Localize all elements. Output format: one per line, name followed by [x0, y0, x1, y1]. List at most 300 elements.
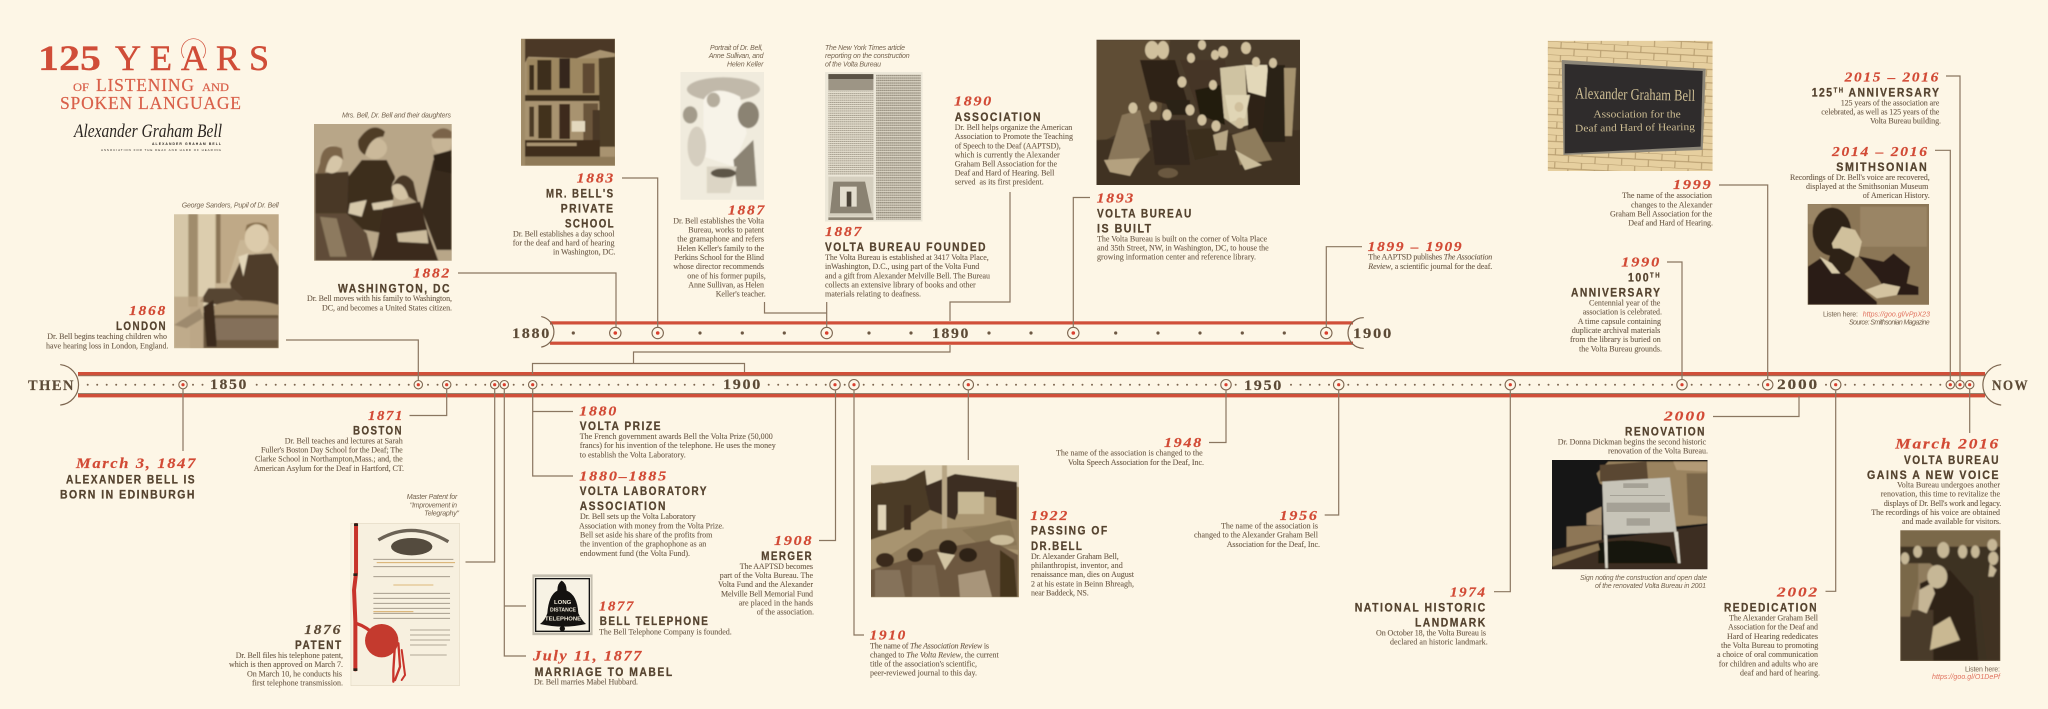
heading: VOLTA BUREAU FOUNDED [825, 240, 987, 254]
body text: 125 years of the association are [1841, 99, 1940, 108]
photo: master patent document [350, 523, 460, 686]
year: 1899 – 1909 [1368, 239, 1463, 254]
body text [1097, 234, 1269, 262]
heading: VOLTA BUREAU [1904, 453, 2000, 467]
body text: Keller's teacher. [716, 290, 766, 299]
body text: the Volta Bureau grounds. [1579, 344, 1662, 353]
year: 1974 [1450, 584, 1487, 599]
body text: changed to the Alexander Graham Bell [1194, 531, 1319, 540]
event markers [179, 380, 1974, 390]
event: March 2016 Volta Bureau Gains a New Voice [1867, 437, 2007, 681]
connector: 2002 [1826, 390, 1836, 591]
body text: DC, and becomes a United States citizen. [322, 304, 452, 313]
logo: AG Bell signature: ASSOCIATION FOR THE DEAF AND HARD OF HEARING [101, 148, 222, 152]
event: 1990 100th Anniversary [1570, 255, 1662, 353]
connector: 1890 [532, 192, 1010, 374]
heading [1355, 601, 1487, 630]
body text: Dr. Bell begins teaching children who [47, 332, 167, 341]
listen link: https://goo.gl/O1DePf [1932, 674, 2001, 681]
event: 1880 Volta Prize [579, 403, 776, 459]
connector: 1876 [466, 389, 495, 562]
connector: 1974 [1494, 390, 1510, 592]
body text: Graham Bell Association for the [1610, 209, 1712, 218]
body text [1376, 629, 1488, 647]
body text [1790, 173, 1930, 200]
photo caption: Anne Sullivan, and [708, 53, 765, 60]
body text: which is then approved on March 7. [229, 660, 343, 669]
label: NOW: NOW [1992, 378, 2029, 394]
event: 1887 Volta Bureau Founded [825, 45, 990, 299]
body text: title of the association's scientific, [870, 660, 977, 669]
body text: The AAPTSD becomes [740, 562, 813, 571]
decade labels: 1900 [723, 377, 762, 393]
body text: Volta Bureau undergoes another [1897, 481, 2000, 490]
heading [1031, 524, 1109, 553]
event: 1876 Patent [229, 494, 460, 688]
year: 2014 – 2016 [1831, 144, 1929, 159]
event: 1868 London [46, 202, 287, 357]
event: 1956 name change [1194, 508, 1320, 549]
event: 2014-2016 Smithsonian [1790, 144, 1937, 327]
photo: plaque [1548, 40, 1713, 171]
icon: Long Distance Telephone bell sign: TELEPHONE [545, 616, 582, 622]
heading: ASSOCIATION [580, 499, 667, 513]
logo: AG Bell signature [72, 121, 222, 152]
year: July 11, 1877 [532, 649, 643, 665]
body text: Deaf and Hard of Hearing. Bell [955, 169, 1055, 178]
heading: RENOVATION [1625, 425, 1706, 439]
body text: Dr. Bell establishes a day school [513, 230, 615, 239]
photo: Volta Bureau sign [1552, 460, 1708, 570]
connector: 1999 [1719, 185, 1768, 380]
body text: Association for the Deaf and [1728, 623, 1818, 632]
heading [60, 472, 196, 501]
year: March 3, 1847 [75, 456, 197, 472]
body text: Dr. Bell sets up the Volta Laboratory [580, 512, 696, 521]
heading: PRIVATE [561, 201, 614, 215]
body text: whose director recommends [673, 262, 764, 271]
event: 1974 National Historic Landmark [1355, 584, 1488, 647]
body text: Deaf and Hard of Hearing. [1628, 218, 1713, 227]
year: 1948 [1164, 435, 1203, 450]
event: 1877 Bell Telephone [532, 574, 732, 636]
connector: 1908 [819, 390, 836, 540]
connector: 1883 [622, 178, 658, 327]
connector: 2000 [1713, 396, 1799, 416]
labels: 1880, 1890, 1900: 1890 [932, 326, 970, 342]
connector: 1899 [1326, 247, 1362, 327]
year: 1868 [129, 303, 167, 318]
body text: On March 10, he conducts his [247, 669, 342, 678]
body text: A time capsule containing [1578, 317, 1661, 326]
year: 1880 [579, 403, 618, 418]
body text: for children and adults who are [1719, 659, 1818, 668]
event: 1999 name change [1548, 41, 1713, 227]
body text: Helen Keller's family to the [677, 244, 764, 253]
body text: Bell set aside his share of the profits from [580, 531, 713, 540]
body text: Dr. Bell establishes the Volta [673, 217, 764, 226]
logo: AG Bell signature: Alexander Graham Bell [72, 121, 222, 142]
body text: from the library is buried on [1570, 335, 1661, 344]
body text: the Volta Bureau to promoting [1721, 641, 1818, 650]
year: 1887 [825, 224, 863, 239]
heading [546, 186, 615, 230]
body text: and made available for visitors. [1902, 517, 2001, 526]
year: 1922 [1030, 508, 1069, 523]
body text: renovation of the Volta Bureau. [1608, 447, 1708, 456]
heading [1867, 453, 2000, 482]
event: 1922 Passing of Dr. Bell [860, 455, 1135, 605]
photo caption [1580, 575, 1707, 590]
body text: francs) for his invention of the telephone. He uses the money [580, 441, 776, 450]
heading: NATIONAL HISTORIC [1355, 601, 1487, 615]
body text: Association to Promote the Teaching [955, 132, 1073, 141]
body text: of Speech to the Deaf (AAPTSD), [955, 141, 1061, 150]
body text: of American History. [1863, 191, 1930, 200]
body text: Dr. Bell teaches and lectures at Sarah [285, 436, 403, 445]
body text: Centennial year of the [1589, 299, 1661, 308]
year: 1887 [728, 202, 766, 217]
year: 1908 [774, 533, 813, 548]
body text [1871, 481, 2001, 526]
body text: inWashington, D.C., using part of the Volta Fund [825, 262, 979, 271]
photo: plaque: Deaf and Hard of Hearing [1575, 122, 1695, 135]
heading: BELL TELEPHONE [600, 614, 709, 628]
connector: 1877 [504, 389, 526, 656]
photo caption: of the renovated Volta Bureau in 2001 [1595, 583, 1706, 590]
body text: have hearing loss in London, England. [46, 341, 168, 350]
body text: and a gift from Alexander Melville Bell. The Bureau [825, 271, 990, 280]
body text [580, 432, 776, 459]
body text: Hard of Hearing rededicates [1727, 632, 1818, 641]
body text: Dr. Bell moves with his family to Washington, [307, 294, 452, 303]
year: 1990 [1621, 255, 1661, 270]
connector: 1990 [1667, 262, 1682, 380]
heading: VOLTA LABORATORY [580, 484, 708, 498]
year: 1956 [1280, 508, 1319, 523]
title: 125 Years: 125 [38, 38, 101, 78]
decade labels: 1950 [1244, 378, 1283, 394]
body text [254, 436, 404, 473]
body text: Fuller's Boston Day School for the Deaf; The [261, 446, 403, 455]
body text: materials relating to deafness. [825, 290, 921, 299]
body text: association is celebrated. [1583, 308, 1662, 317]
body text: deaf and hard of hearing. [1740, 668, 1820, 677]
photo caption: George Sanders, Pupil of Dr. Bell [182, 202, 279, 210]
heading: MERGER [761, 549, 813, 563]
body text: declared an historic landmark. [1390, 638, 1488, 647]
event: July 11, 1877 Marriage to Mabel [532, 649, 674, 687]
body text: first telephone transmission. [252, 679, 343, 688]
body text: philanthropist, inventor, and [1031, 561, 1123, 570]
body text [1367, 253, 1492, 271]
year: 1871 [368, 408, 404, 423]
body text: The name of The Association Review is [870, 641, 989, 650]
year: 1876 [304, 622, 342, 637]
heading: REDEDICATION [1724, 601, 1818, 615]
body text: a choice of oral communication [1717, 650, 1818, 659]
event: 1908 Merger [718, 533, 814, 617]
event: 1883 Mr. Bell's Private School [513, 33, 623, 257]
heading: TH [1650, 273, 1661, 280]
title: 125 Years: YEARS [115, 38, 269, 78]
body text: the invention of the graphophone as an [580, 540, 706, 549]
connector: March 2016 [1969, 389, 1971, 433]
body text: On October 18, the Volta Bureau is [1376, 629, 1486, 638]
body text: Clarke School in Northampton,Mass.; and, the [255, 455, 403, 464]
year: 1877 [599, 598, 635, 613]
body text: The Alexander Graham Bell [1729, 614, 1819, 623]
event: 2000 Renovation [1547, 409, 1713, 590]
subtitle: SPOKEN LANGUAGE [60, 93, 241, 113]
event: 1880-1885 Volta Laboratory Association [579, 468, 724, 558]
body text: The French government awards Bell the Volta Prize (50,000 [580, 432, 773, 441]
photo caption: Mrs. Bell, Dr. Bell and their daughters [342, 113, 452, 120]
body text: Dr. Bell marries Mabel Hubbard. [534, 678, 638, 687]
decade labels [210, 377, 1819, 394]
body text: The Volta Bureau is built on the corner of Volta Place [1097, 234, 1267, 243]
connector: 1887 [764, 302, 827, 327]
body text: The name of the association is changed to the [1056, 449, 1203, 458]
connector: 1882 [458, 273, 616, 327]
photo caption [825, 45, 910, 68]
photo: funeral crowd [871, 465, 1019, 598]
inset timeline: 1880 to 1900 [512, 317, 1393, 348]
body text: Melville Bell Memorial Fund [721, 589, 813, 598]
body text: for the deaf and hard of hearing [513, 239, 614, 248]
body text [955, 123, 1073, 187]
year tick dots [88, 384, 1942, 386]
subtitle: OF [73, 80, 89, 94]
body text: Volta Speech Association for the Deaf, Inc. [1068, 458, 1204, 467]
body text: Recordings of Dr. Bell's voice are recovered, [1790, 173, 1930, 182]
body text: growing information center and reference library. [1097, 253, 1256, 262]
event: 2002 Rededication [1717, 585, 1820, 677]
heading: 125 [1812, 86, 1838, 100]
listen link [1932, 666, 2001, 681]
year: March 2016 [1894, 437, 2000, 453]
photo: Bell family [314, 124, 452, 261]
subtitle: LISTENING [96, 75, 194, 95]
decade labels: 1850 [210, 377, 248, 393]
body text: Volta Bureau building. [1870, 117, 1941, 126]
year: 1893 [1097, 190, 1135, 205]
photo caption [407, 494, 460, 517]
heading: SMITHSONIAN [1836, 160, 1928, 174]
heading [1571, 271, 1662, 300]
body text: Dr. Bell helps organize the American [955, 123, 1072, 132]
event: 1871 Boston [254, 408, 404, 473]
year: 2000 [1663, 409, 1707, 424]
body text: Dr. Alexander Graham Bell, [1031, 552, 1119, 561]
listen link: Listen here: [1823, 312, 1858, 319]
photo: Bell speaking into telephone [1808, 204, 1929, 305]
connector: 1910 [854, 390, 864, 635]
body text: part of the Volta Bureau. The [720, 571, 813, 580]
year: 1883 [577, 170, 615, 185]
body text: displays of Dr. Bell's work and legacy. [1884, 499, 2001, 508]
body text [1570, 299, 1662, 353]
heading: VOLTA BUREAU [1097, 206, 1193, 220]
heading: TH [1834, 88, 1844, 95]
body text: of the association. [757, 608, 814, 617]
body text: Anne Sullivan, as Helen [688, 280, 764, 289]
photo: school building [521, 38, 615, 166]
heading: LANDMARK [1415, 616, 1487, 630]
connector: 1948 [1209, 390, 1226, 442]
event: 1910 The Volta Review [870, 628, 999, 678]
year: 1999 [1673, 177, 1712, 192]
event: March 3, 1847 birth [60, 456, 197, 501]
heading: ALEXANDER BELL IS [66, 472, 196, 486]
body text: Dr. Bell files his telephone patent, [236, 651, 343, 660]
subtitle: AND [202, 80, 229, 94]
photo caption: Telegraphy" [424, 510, 460, 517]
body text: the gramaphone and refers [677, 235, 764, 244]
heading [580, 484, 708, 513]
event: 1887 Helen Keller [673, 45, 770, 299]
photo: newspaper article [825, 72, 922, 222]
body text: in Washington, DC. [553, 248, 616, 257]
icon: Long Distance Telephone bell sign: LONG [554, 600, 571, 606]
body text: The Volta Bureau is established at 3417 Volta Place, [825, 253, 989, 262]
labels: 1880, 1890, 1900: 1900 [1353, 326, 1393, 342]
body text: The recordings of his voice are obtained [1871, 508, 2000, 517]
event: 1890 Association [954, 94, 1073, 187]
heading: ANNIVERSARY [1571, 286, 1662, 300]
body text [1717, 614, 1820, 677]
connector: 1956 [1325, 390, 1339, 515]
body text: near Baddeck, NS. [1031, 588, 1089, 597]
heading: IS BUILT [1097, 221, 1153, 235]
connector: 2014 [1935, 150, 1950, 380]
photo caption: reporting on the construction [825, 53, 910, 60]
heading [1097, 206, 1193, 235]
heading: LONDON [116, 319, 167, 333]
body text: displayed at the Smithsonian Museum [1806, 182, 1929, 191]
body text [1610, 191, 1713, 227]
year: 2015 – 2016 [1844, 70, 1940, 85]
body text: are placed in the hands [739, 599, 813, 608]
event markers [610, 327, 1332, 339]
body text [46, 332, 168, 350]
labels: 1880, 1890, 1900: 1880 [512, 326, 551, 342]
title block [38, 38, 269, 152]
photo caption: Master Patent for [407, 494, 458, 501]
photo: plaque: Association for the [1593, 109, 1681, 120]
labels: 1880, 1890, 1900 [512, 326, 1393, 342]
body text: collects an extensive library of books and other [825, 280, 976, 289]
body text [1558, 438, 1708, 456]
decade labels: 2000 [1777, 377, 1819, 393]
photo: group portrait [1096, 40, 1300, 185]
main timeline: Then to Now [28, 365, 2029, 405]
icon: Long Distance Telephone bell sign: DISTANCE [550, 608, 577, 614]
body text [718, 562, 814, 617]
body text: served as its first president. [955, 178, 1044, 187]
subtitle [60, 75, 241, 113]
body text [825, 253, 990, 299]
body text: Association with money from the Volta Prize. [579, 521, 724, 530]
heading: BOSTON [353, 424, 403, 438]
event: 1948 name change [1056, 435, 1204, 467]
body text [1056, 449, 1204, 467]
listen link: https://goo.gl/vPpX23 [1863, 312, 1930, 319]
photo caption: Portrait of Dr. Bell, [710, 45, 763, 52]
photo: Bell, Sullivan and Keller [680, 72, 764, 200]
connector: 1880 [533, 389, 573, 476]
photo caption: "Improvement in [410, 502, 457, 509]
body text: renaissance man, dies on August [1031, 570, 1135, 579]
logo: AG Bell signature: ALEXANDER GRAHAM BELL [152, 142, 221, 146]
heading: ASSOCIATION [955, 110, 1042, 124]
year: 2002 [1776, 585, 1819, 600]
body text [1194, 522, 1320, 549]
body text: one of his former pupils, [687, 271, 766, 280]
listen link [1823, 312, 1930, 319]
year dots [572, 331, 1286, 335]
body text: changed to The Volta Review, the current [870, 650, 999, 659]
heading: PASSING OF [1031, 524, 1109, 538]
body text [870, 641, 999, 678]
body text: renovation, this time to revitalize the [1881, 490, 2000, 499]
body text: Graham Bell Association for the [955, 159, 1057, 168]
icon: Long Distance Telephone bell sign [532, 574, 592, 636]
photo: Bell on the telephone [1900, 530, 2000, 661]
photo caption: of the Volta Bureau [825, 61, 881, 68]
body text: The name of the association is [1221, 522, 1318, 531]
event: 1899-1909 The Association Review [1367, 239, 1492, 271]
connector: 1922 [967, 390, 969, 460]
year: 1910 [870, 628, 907, 643]
body text: Bureau, works to patent [688, 226, 765, 235]
body text: Association for the Deaf, Inc. [1227, 540, 1320, 549]
photo caption: Helen Keller [727, 61, 764, 68]
body text [579, 512, 724, 558]
body text [307, 294, 452, 313]
body text: endowment fund (the Volta Fund). [580, 549, 690, 558]
body text: celebrated, as well as 125 years of the [1821, 108, 1940, 117]
body text [673, 217, 766, 299]
heading: VOLTA PRIZE [580, 419, 662, 433]
year: 1890 [954, 94, 993, 109]
heading: WASHINGTON, DC [338, 281, 451, 295]
body text: 2 at his estate in Beinn Bhreagh, [1031, 579, 1134, 588]
body text: duplicate archival materials [1572, 326, 1660, 335]
connector: 1868 [286, 340, 418, 380]
heading: PATENT [295, 638, 343, 652]
label: THEN: THEN [28, 378, 75, 394]
body text: Review, a scientific journal for the deaf. [1367, 262, 1492, 271]
connector: 1847 [182, 389, 184, 451]
body text [1031, 552, 1135, 597]
photo caption: Sign noting the construction and open date [1580, 575, 1707, 582]
year: 1880–1885 [579, 468, 668, 483]
body text: The AAPTSD publishes The Association [1368, 253, 1492, 262]
year: 1882 [413, 265, 451, 280]
heading: ANNIVERSARY [1844, 86, 1940, 100]
body text: changes to the Alexander [1631, 200, 1713, 209]
body text [229, 651, 343, 688]
body text: Volta Fund and the Alexander [718, 580, 813, 589]
heading: GAINS A NEW VOICE [1867, 468, 2000, 482]
heading: DR.BELL [1031, 539, 1083, 553]
heading: MR. BELL'S [546, 186, 614, 200]
source credit: Source: Smithsonian Magazine [1849, 320, 1930, 327]
photo caption [708, 45, 765, 68]
photo caption: The New York Times article [825, 45, 905, 52]
heading: BORN IN EDINBURGH [60, 487, 196, 501]
